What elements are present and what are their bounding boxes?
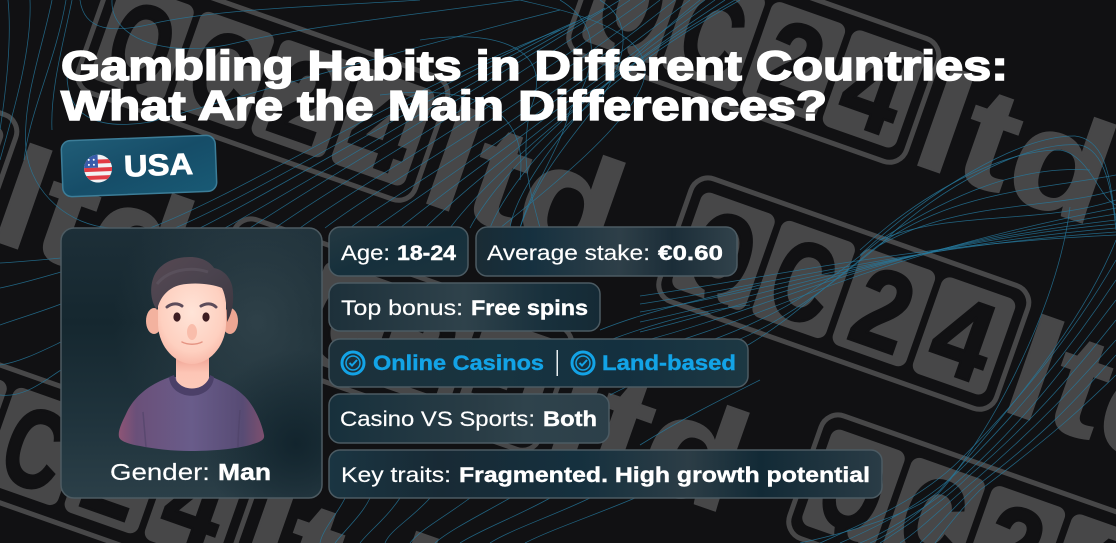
watermark logos pattern: 4 (334, 61, 430, 198)
chip: key traits: Key traits: (341, 464, 451, 487)
chip: key traits (329, 450, 882, 498)
watermark logos pattern: 4 (458, 311, 554, 448)
country badge: USA (61, 135, 217, 197)
chip: casino vs sports: Both (543, 408, 597, 431)
chip: venues (329, 339, 748, 387)
gender label: Gender: (110, 459, 210, 485)
chip: age: Age: (341, 242, 390, 265)
chip: age: 18-24 (397, 242, 456, 265)
chip: average stake: €0.60 (658, 242, 723, 265)
gender label (110, 459, 271, 485)
watermark logos pattern: 2 (837, 242, 929, 378)
watermark logos pattern: 4 (915, 270, 1011, 407)
icon: check online casinos (342, 352, 364, 374)
icon: US flag (84, 154, 113, 183)
chip: venues: Online Casinos (373, 352, 544, 375)
watermark logos pattern: ltd (407, 79, 643, 293)
chip: casino vs sports (329, 394, 609, 443)
chip: venues: Land-based (602, 352, 736, 375)
watermark logos pattern: ltd (531, 329, 767, 543)
chip: top bonus: Top bonus: (341, 297, 463, 320)
watermark logos pattern: Q (674, 185, 772, 323)
chip: age (329, 227, 468, 276)
watermark logos pattern: 4 (825, 23, 921, 160)
watermark logos pattern: Q (217, 226, 315, 364)
title: Gambling Habits in Different Countries: (61, 42, 1008, 89)
panel: avatar (61, 228, 322, 498)
watermark logos pattern: 2 (256, 33, 348, 169)
icon: check land-based (572, 352, 594, 374)
chip: key traits: Fragmented. High growth potential (459, 464, 870, 487)
chip: average stake: Average stake: (487, 242, 650, 265)
title (61, 42, 1008, 129)
watermark logos pattern: C (298, 254, 394, 391)
chip: average stake (476, 227, 737, 276)
watermark logos pattern: ltd (898, 41, 1116, 255)
watermark logos pattern: 2 (380, 283, 472, 419)
icon: man avatar (119, 257, 264, 451)
gender label: Man (218, 459, 271, 485)
chip: casino vs sports: Casino VS Sports: (340, 408, 535, 431)
title: What Are the Main Differences? (61, 82, 827, 129)
chip: top bonus (329, 283, 600, 331)
chip: top bonus: Free spins (471, 297, 588, 320)
watermark logos pattern: C (174, 4, 270, 141)
badge label: USA (123, 148, 194, 184)
watermark logos pattern: C (755, 213, 851, 350)
